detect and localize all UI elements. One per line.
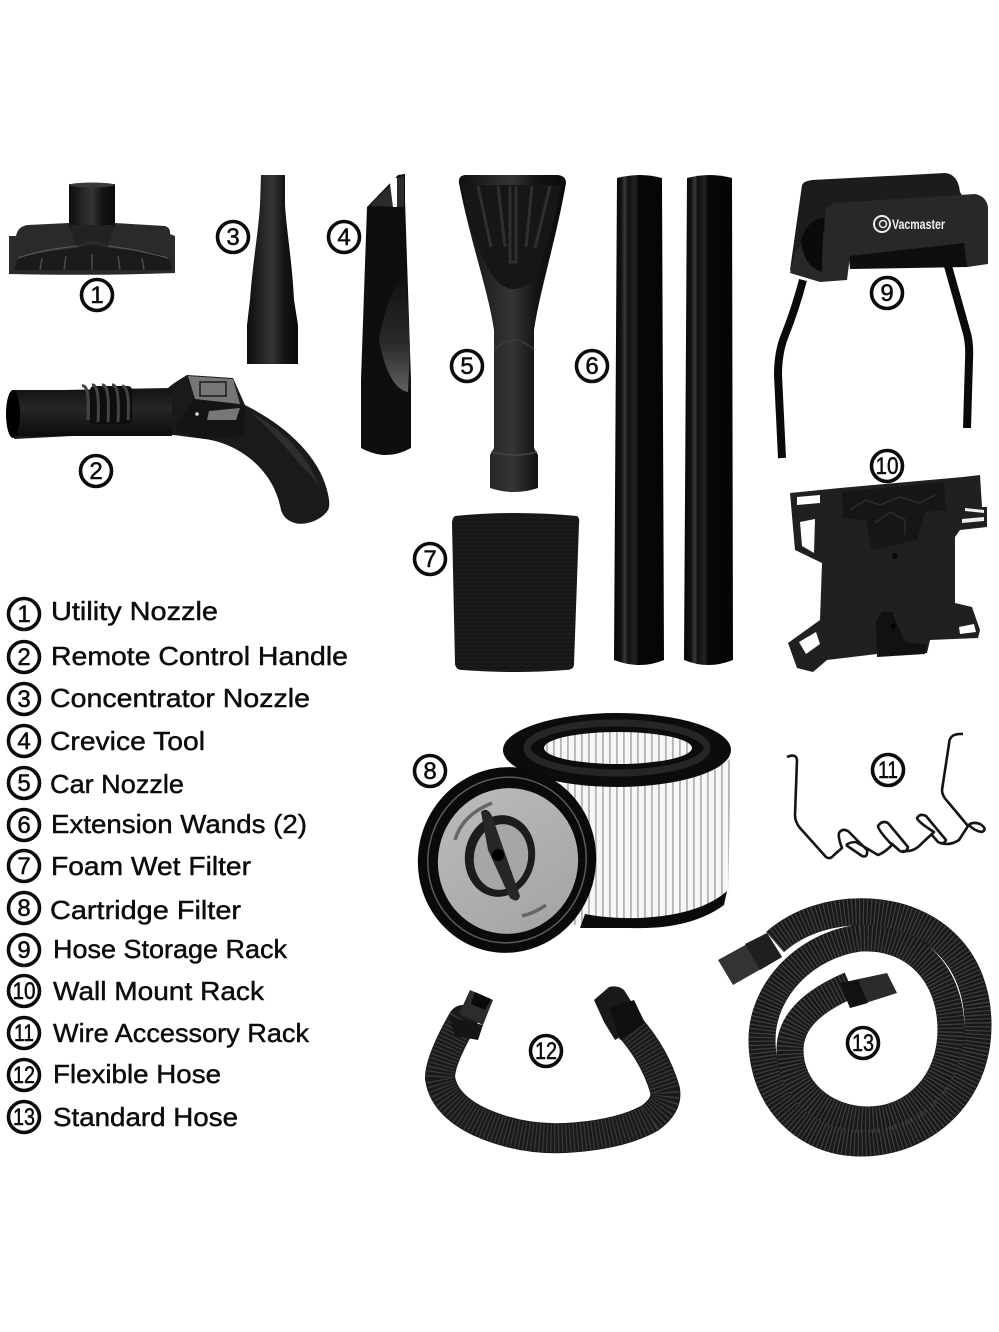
badge: 1	[82, 280, 112, 310]
legend item 8: 8	[17, 895, 31, 922]
legend item 5	[8, 768, 184, 799]
badge: 3: 3	[226, 224, 240, 251]
icon: wire accessory rack	[787, 734, 985, 858]
icon: remote control handle	[6, 375, 329, 524]
right connector	[594, 986, 645, 1040]
legend item 9: 9	[17, 937, 31, 964]
logo: Vacmaster	[892, 216, 945, 232]
icon: car nozzle	[459, 175, 566, 492]
badge: 4: 4	[337, 224, 351, 251]
legend item 8: Cartridge Filter	[50, 895, 241, 925]
badge: 10: 10	[876, 453, 898, 480]
legend item 2: 2	[17, 644, 31, 671]
logo	[874, 216, 945, 232]
legend item 12: 12	[13, 1062, 35, 1089]
badge: 7: 7	[423, 546, 437, 573]
badge: 5	[452, 350, 482, 382]
badge: 1: 1	[90, 282, 104, 309]
badge: 6: 6	[585, 353, 599, 380]
badge: 13: 13	[852, 1030, 874, 1057]
wand left	[614, 175, 664, 665]
icon: wall mount rack	[788, 475, 987, 672]
legend item 3: Concentrator Nozzle	[50, 683, 310, 713]
badge: 11: 11	[878, 757, 898, 784]
legend item 3: 3	[17, 686, 31, 713]
legend item 2: Remote Control Handle	[51, 641, 348, 671]
legend item 8	[8, 892, 241, 925]
legend item 5: Car Nozzle	[50, 769, 184, 799]
icon: crevice tool	[361, 174, 411, 455]
legend item 10: Wall Mount Rack	[53, 976, 265, 1006]
icon: extension wands	[614, 175, 733, 665]
legend item 1: 1	[17, 601, 31, 628]
badge: 5: 5	[460, 353, 474, 380]
icon: standard hose	[718, 912, 978, 1143]
badge: 9	[872, 278, 902, 308]
legend item 4: 4	[17, 728, 31, 755]
legend item 13: 13	[13, 1104, 35, 1131]
legend item 6: 6	[17, 812, 31, 839]
badge: 12: 12	[535, 1038, 557, 1065]
ridges	[82, 385, 132, 424]
icon: concentrator nozzle	[247, 175, 298, 364]
lower connector	[840, 973, 897, 1008]
legend item 13: Standard Hose	[53, 1102, 238, 1132]
legend item 11: Wire Accessory Rack	[53, 1018, 310, 1048]
badge: 6	[576, 350, 608, 382]
cartridge body	[503, 713, 731, 928]
removable lid	[401, 751, 613, 969]
legend item 9: Hose Storage Rack	[53, 934, 288, 964]
badge: 8: 8	[423, 758, 437, 785]
icon: hose storage rack	[778, 173, 988, 458]
icon: flexible hose	[440, 986, 665, 1138]
legend item 10: 10	[12, 978, 36, 1005]
badge: 4	[328, 222, 360, 252]
legend item 5: 5	[17, 770, 31, 797]
icon: foam wet filter	[452, 513, 579, 672]
legend item 11: 11	[14, 1020, 34, 1047]
left connector	[449, 990, 493, 1040]
badge: 9: 9	[880, 280, 894, 307]
upper connector	[718, 933, 782, 985]
legend item 1	[8, 596, 218, 630]
legend item 12: Flexible Hose	[53, 1059, 221, 1089]
legend item 7: 7	[17, 853, 31, 880]
badge: 7	[414, 544, 446, 574]
legend item 7: Foam Wet Filter	[51, 851, 251, 881]
badge: 2: 2	[89, 458, 103, 485]
legend	[8, 596, 348, 1132]
icon: cartridge filter	[401, 713, 731, 969]
badge: 2	[80, 456, 112, 486]
badge: 3	[218, 222, 248, 252]
legend item 1: Utility Nozzle	[51, 596, 218, 626]
legend item 4: Crevice Tool	[50, 726, 205, 756]
legend item 6: Extension Wands (2)	[51, 809, 307, 839]
icon: utility nozzle	[9, 182, 175, 275]
wand right	[684, 175, 733, 665]
badge: 8	[414, 756, 446, 786]
